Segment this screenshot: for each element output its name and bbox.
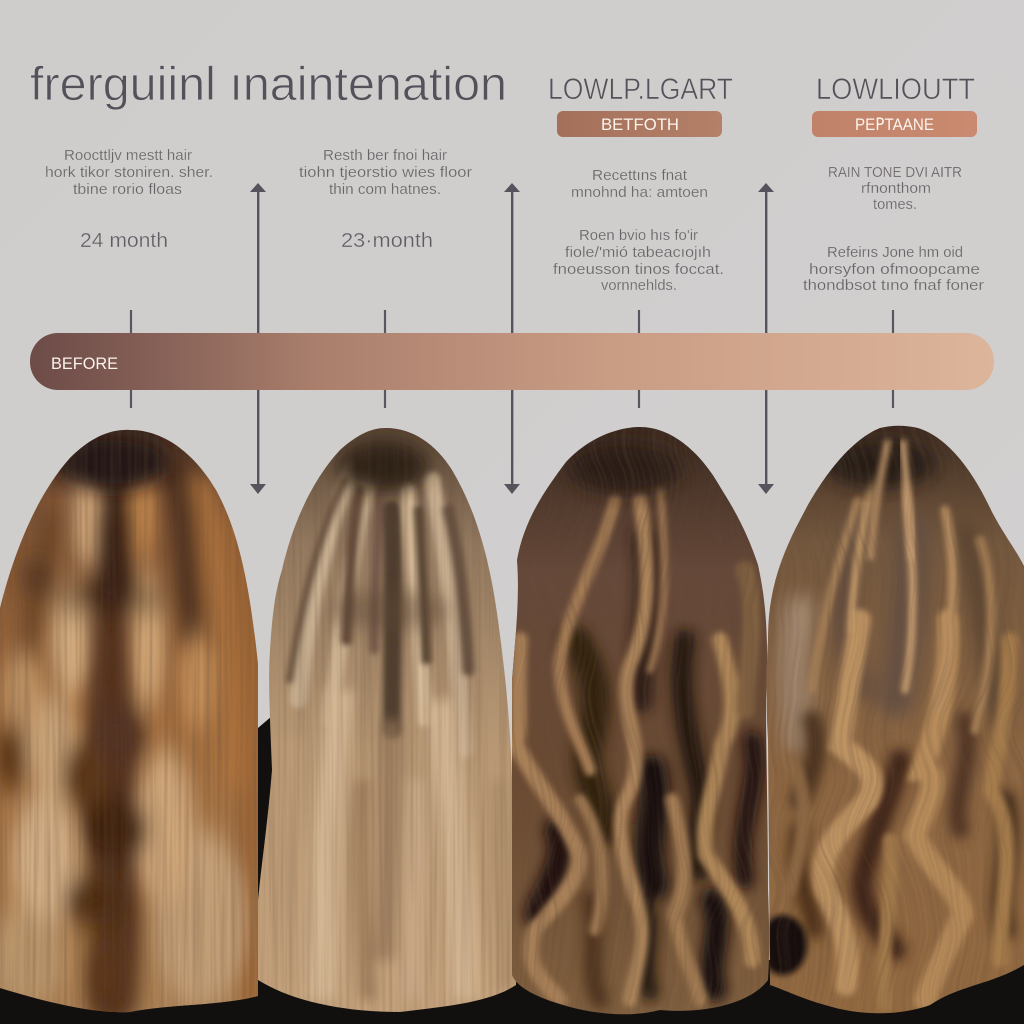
hair 1: before (0, 420, 262, 1020)
dark garment behind hair (0, 716, 1024, 1024)
hair 1 strand texture (0, 420, 262, 1020)
column 3 badge (557, 111, 722, 137)
column 4 description: tomes. (873, 197, 917, 213)
column 3 badge: BETFOTH (601, 115, 679, 134)
column 3 description (553, 168, 724, 294)
column 4 description: thondbsot tıno fnaf foner (803, 278, 984, 294)
column 3 description: Roen bvio hıs fo'ir (579, 228, 698, 244)
hair 3: after lowlights (505, 420, 773, 1020)
column 3 description: vornnehlds. (601, 278, 677, 294)
hair 2 strand texture (260, 453, 512, 1012)
column 4 description: Refeirıs Jone hm oid (827, 245, 963, 261)
column 1 description: hork tikor stoniren. sher. (45, 165, 213, 181)
column 3 description: fnoeusson tinos foccat. (553, 262, 724, 278)
column 1 description: tbine rorio floas (73, 182, 182, 198)
timeline tick marks (131, 310, 893, 408)
column 4 heading: LOWLIOUTT (816, 73, 975, 106)
column 3 description: Recettıns fnat (592, 168, 687, 184)
column 4 badge: PEꓑTAANE (855, 115, 934, 134)
timeline label: BEFORE (51, 354, 118, 373)
column 1 duration: 24 month (80, 230, 168, 252)
column 2 duration: 23·month (341, 230, 433, 252)
column 2 description: tiohn tjeorstio wies floor (299, 165, 472, 181)
column 2 description (299, 148, 472, 198)
column 3 description: mnohnd ha: amtoen (571, 185, 708, 201)
column 1 description: Roocttljv mestt hair (64, 148, 192, 164)
column 3 description: fiole/'mió tabeacıojıh (565, 245, 711, 261)
arrow 1 (250, 183, 266, 494)
column 4 description: horsyfon ofmoopcame (809, 262, 980, 278)
column 4 description: RAIN TONE DVI AITR (828, 165, 962, 181)
column 4 badge (812, 111, 977, 137)
column 2 description: thin com hatnes. (329, 182, 441, 198)
arrow 2 (504, 183, 520, 494)
column 4 description: rfnonthom (861, 181, 931, 197)
hair 4: after lowlights and toner (759, 420, 1024, 1020)
arrow 3 (758, 183, 774, 494)
column 1 description (45, 148, 213, 198)
column 3 heading: LOWLP.LGART (548, 73, 733, 106)
hair 2: after first visit (256, 420, 520, 1020)
column 4 description (803, 165, 984, 294)
column 2 description: Resth ber fnoi hair (323, 148, 447, 164)
hair 4 strand texture (764, 420, 1024, 1020)
timeline bar (30, 333, 994, 390)
hair 3 strand texture (505, 420, 773, 1020)
title: frerguiinl ınaintenation (30, 57, 507, 110)
